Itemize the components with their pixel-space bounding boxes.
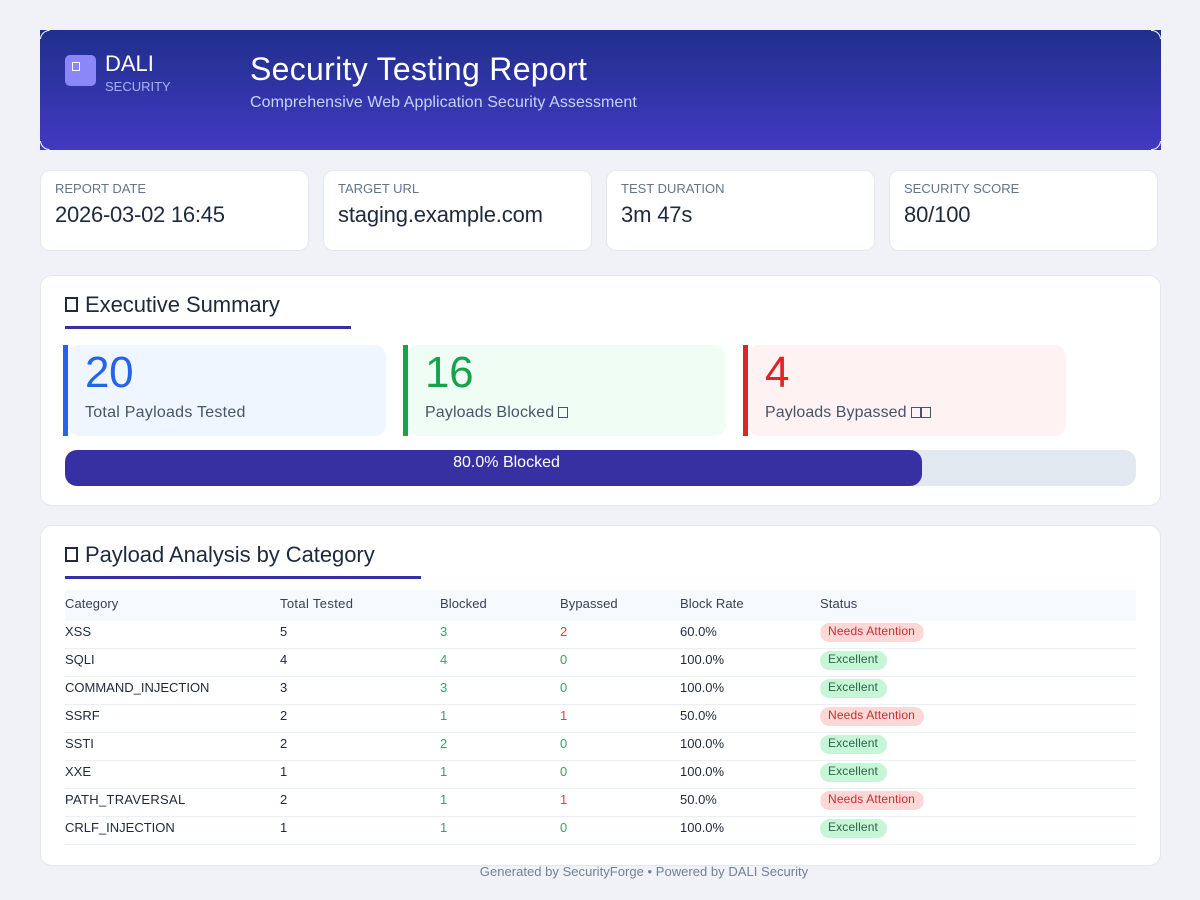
heading: payload analysis: Payload Analysis by Category: [85, 542, 375, 567]
row: SQLI: 0: [560, 652, 567, 667]
progress bar: [65, 450, 1136, 486]
meta card: report date: REPORT DATE: [55, 181, 146, 196]
category table: [65, 590, 1136, 845]
stat: total payloads: 20: [85, 348, 133, 397]
row: SQLI: [65, 649, 1136, 677]
heading underline: payload analysis: [65, 576, 421, 579]
meta card: security score: [889, 170, 1158, 251]
row: SSRF: 2: [280, 708, 287, 723]
row: PATH_TRAVERSAL: 1: [440, 792, 447, 807]
row: XXE: Excellent: [828, 764, 878, 778]
row: CRLF_INJECTION: 1: [440, 820, 447, 835]
table header: [65, 590, 1136, 621]
stat: payloads blocked: [403, 345, 726, 436]
row: CRLF_INJECTION: CRLF_INJECTION: [65, 820, 175, 835]
report title: Security Testing Report: [250, 51, 587, 87]
row: XXE: 0: [560, 764, 567, 779]
row: XSS: XSS: [65, 624, 91, 639]
row: SSRF: 1: [440, 708, 447, 723]
row: PATH_TRAVERSAL: PATH_TRAVERSAL: [65, 792, 186, 807]
meta card: security score: 80/100: [904, 202, 970, 227]
row: CRLF_INJECTION: 100.0%: [680, 820, 724, 835]
header banner: [40, 30, 1161, 150]
meta card: target url: staging.example.com: [338, 202, 543, 227]
panel: payload analysis: [40, 525, 1161, 866]
stat: payloads blocked: 16: [425, 348, 473, 397]
row: SSTI: SSTI: [65, 736, 94, 751]
row: COMMAND_INJECTION: 0: [560, 680, 567, 695]
row: CRLF_INJECTION: 1: [280, 820, 287, 835]
row: XXE: [65, 761, 1136, 789]
row: CRLF_INJECTION: [65, 817, 1136, 845]
row: XXE: 1: [280, 764, 287, 779]
table header: Status: [820, 596, 857, 611]
meta card: report date: [40, 170, 309, 251]
stat: total payloads: Total Payloads Tested: [85, 404, 246, 421]
row: SSRF: [65, 705, 1136, 733]
row: COMMAND_INJECTION: Excellent: [828, 680, 878, 694]
table header: Blocked: [440, 596, 487, 611]
meta card: target url: TARGET URL: [338, 181, 419, 196]
row: SQLI: 4: [440, 652, 447, 667]
row: SQLI: Excellent: [828, 652, 878, 666]
row: SSTI: Excellent: [828, 736, 878, 750]
meta card: test duration: [606, 170, 875, 251]
row: COMMAND_INJECTION: 3: [440, 680, 447, 695]
row: CRLF_INJECTION: 0: [560, 820, 567, 835]
row: SSTI: [65, 733, 1136, 761]
row: SQLI: 4: [280, 652, 287, 667]
table header: Total Tested: [280, 596, 353, 611]
row: COMMAND_INJECTION: COMMAND_INJECTION: [65, 680, 209, 695]
row: PATH_TRAVERSAL: 2: [280, 792, 287, 807]
row: XSS: [65, 621, 1136, 649]
meta card: test duration: 3m 47s: [621, 202, 692, 227]
missing glyph box: [72, 62, 80, 71]
heading underline: executive summary: [65, 326, 351, 329]
row: COMMAND_INJECTION: 3: [280, 680, 287, 695]
table header: Bypassed: [560, 596, 618, 611]
meta card: report date: 2026-03-02 16:45: [55, 202, 225, 227]
row: SSRF: SSRF: [65, 708, 100, 723]
row: SSTI: 2: [440, 736, 447, 751]
stat: total payloads: [63, 345, 386, 436]
logo icon: [65, 55, 96, 86]
corner arcs: [40, 30, 1161, 150]
logo subtitle: SECURITY: [105, 79, 171, 94]
report subtitle: Comprehensive Web Application Security Assessment: [250, 94, 637, 111]
progress fill: 80.0% Blocked: [453, 454, 560, 471]
row: COMMAND_INJECTION: 100.0%: [680, 680, 724, 695]
row: XXE: 100.0%: [680, 764, 724, 779]
row: CRLF_INJECTION: Excellent: [828, 820, 878, 834]
panel: executive summary: [40, 275, 1161, 506]
row: XSS: 2: [560, 624, 567, 639]
footer: Generated by SecurityForge • Powered by DALI Security: [480, 864, 808, 879]
row: COMMAND_INJECTION: [65, 677, 1136, 705]
row: SSRF: Needs Attention: [828, 708, 915, 722]
table header: Category: [65, 596, 118, 611]
stat: payloads bypassed: [743, 345, 1066, 436]
row: SSTI: 2: [280, 736, 287, 751]
row: SSTI: 100.0%: [680, 736, 724, 751]
row: SSRF: 1: [560, 708, 567, 723]
row: SSTI: 0: [560, 736, 567, 751]
row: SQLI: 100.0%: [680, 652, 724, 667]
row: SSRF: 50.0%: [680, 708, 717, 723]
row: PATH_TRAVERSAL: 1: [560, 792, 567, 807]
row: XSS: Needs Attention: [828, 624, 915, 638]
meta card: security score: SECURITY SCORE: [904, 181, 1019, 196]
row: PATH_TRAVERSAL: [65, 789, 1136, 817]
row: XSS: 5: [280, 624, 287, 639]
row: PATH_TRAVERSAL: 50.0%: [680, 792, 717, 807]
row: PATH_TRAVERSAL: Needs Attention: [828, 792, 915, 806]
stat: payloads blocked: Payloads Blocked: [425, 404, 554, 421]
progress fill: [65, 450, 922, 486]
heading: executive summary: Executive Summary: [85, 292, 280, 317]
table header: Block Rate: [680, 596, 744, 611]
logo name: DALI: [105, 51, 154, 76]
row: SQLI: SQLI: [65, 652, 95, 667]
stat: payloads bypassed: 4: [765, 348, 789, 397]
meta card: target url: [323, 170, 592, 251]
stat: payloads bypassed: Payloads Bypassed: [765, 404, 907, 421]
row: XSS: 3: [440, 624, 447, 639]
row: XXE: XXE: [65, 764, 91, 779]
row: XSS: 60.0%: [680, 624, 717, 639]
meta card: test duration: TEST DURATION: [621, 181, 725, 196]
row: XXE: 1: [440, 764, 447, 779]
